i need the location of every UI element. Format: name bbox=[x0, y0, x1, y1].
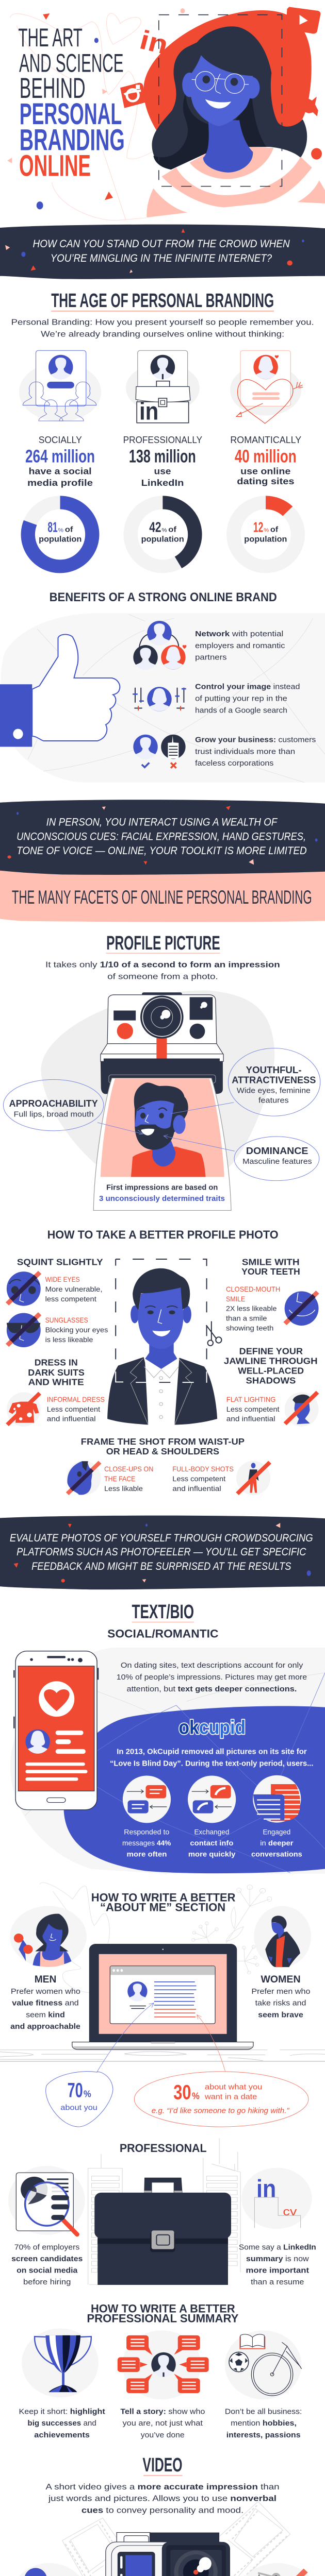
stat: engaged bbox=[251, 1775, 302, 1858]
banner: in person bbox=[0, 800, 325, 875]
intro text: It takes only 1/10 of a second to form an impression bbox=[45, 960, 280, 970]
intro text: We’re already branding ourselves online without thinking: bbox=[41, 330, 284, 338]
stat: responded: more often bbox=[126, 1850, 167, 1858]
tip: tell a story: you are, not just what bbox=[122, 2419, 203, 2428]
stat: linkedin summary: more important bbox=[246, 2267, 309, 2275]
dating text: attention, but text gets deeper connections. bbox=[126, 1685, 297, 1693]
stats: professionally: PROFESSIONALLY bbox=[123, 435, 203, 445]
stat: employers screen candidates bbox=[8, 2166, 85, 2286]
tip: squint slightly: Blocking your eyes bbox=[45, 1326, 108, 1334]
film strips bbox=[62, 2501, 290, 2576]
tip: dress in dark suits and white bbox=[7, 1357, 105, 1427]
benefit: control bbox=[133, 683, 300, 715]
stat: employers screen candidates: before hiring bbox=[23, 2278, 71, 2286]
video intro text bbox=[45, 2482, 280, 2515]
donut chart: 81%: 81 bbox=[47, 519, 58, 535]
benefit: network: employers and romantic bbox=[195, 641, 285, 650]
stats: socially: SOCIALLY bbox=[39, 435, 82, 445]
men text bbox=[10, 1974, 80, 2031]
icon: linkedin briefcase: in bbox=[139, 398, 158, 425]
callout: dominance: Masculine features bbox=[242, 1158, 312, 1166]
callout: 70% about you: about you bbox=[60, 2104, 98, 2112]
tip: define your jawline: and influential bbox=[226, 1415, 275, 1423]
callout: dominance bbox=[234, 1137, 319, 1181]
tip: removes bias bbox=[237, 2563, 317, 2576]
heading: about me: “ABOUT ME” SECTION bbox=[100, 1901, 225, 1913]
women text: Prefer men who bbox=[251, 1988, 310, 1996]
tip: squint slightly: More vulnerable, bbox=[45, 1285, 102, 1294]
pink banner background bbox=[0, 869, 325, 922]
decorative plants bbox=[40, 1883, 272, 1993]
men text: value fitness and bbox=[12, 1999, 79, 2008]
callout: 30% about what you want: e.g. “I’d like someone to go hiking with.” bbox=[152, 2107, 290, 2115]
callout: youthful attractiveness: YOUTHFUL- bbox=[246, 1065, 302, 1075]
stat: responded bbox=[122, 1776, 171, 1858]
section: how to take a better profile photo bbox=[0, 1257, 325, 1589]
callout: dominance: DOMINANCE bbox=[246, 1145, 308, 1156]
men text: seem kind bbox=[26, 2011, 65, 2019]
heading: professional summary: PROFESSIONAL SUMMARY bbox=[87, 2312, 239, 2325]
decorative pink curves bbox=[10, 13, 152, 221]
subheading: social/romantic: SOCIAL/ROMANTIC bbox=[107, 1627, 218, 1640]
stat: responded: messages 44% bbox=[122, 1839, 171, 1847]
thumbs up hand bbox=[0, 634, 120, 747]
callout: youthful attractiveness bbox=[228, 1048, 320, 1116]
stat: exchanged: contact info bbox=[190, 1839, 234, 1847]
illustration: woman portrait with social icons bbox=[120, 7, 325, 217]
donut chart: 42%: % bbox=[161, 527, 167, 533]
benefit: network: partners bbox=[195, 653, 227, 662]
callout: 70% about you: % bbox=[84, 2089, 91, 2099]
section: text and bio bbox=[10, 1546, 325, 1874]
stats: romantically bbox=[230, 435, 302, 486]
tip: squint slightly: SQUINT SLIGHTLY bbox=[17, 1257, 103, 1267]
benefit: grow business bbox=[133, 735, 316, 768]
stats: socially bbox=[25, 435, 95, 488]
women text: WOMEN bbox=[261, 1974, 301, 1985]
tip: dress in dark suits and white: INFORMAL DRESS bbox=[47, 1396, 105, 1404]
briefcase bbox=[94, 2178, 231, 2285]
banner: intro question: HOW CAN YOU STAND OUT FROM THE CROWD WHEN bbox=[32, 238, 290, 250]
women text: seem brave bbox=[258, 2011, 303, 2019]
tip: demonstrates bbox=[11, 2563, 88, 2576]
women text bbox=[251, 1974, 310, 2019]
section: professional bbox=[8, 2138, 316, 2476]
men text: MEN bbox=[35, 1974, 56, 1985]
section: hero bbox=[0, 7, 325, 312]
section: benefits and many facets bbox=[0, 613, 325, 922]
tip: squint slightly: WIDE EYES bbox=[45, 1276, 80, 1284]
dating text bbox=[117, 1662, 307, 1693]
panel: okcupid bbox=[64, 1673, 325, 1873]
donut chart: 12% bbox=[234, 502, 298, 566]
benefit: control: Control your image instead bbox=[195, 683, 300, 691]
printed photo of man: 3 unconsciously determined traits bbox=[99, 1195, 225, 1203]
donut chart: 81%: of bbox=[65, 526, 73, 534]
stat: exchanged: Exchanged bbox=[194, 1828, 229, 1836]
stats: romantically: ROMANTICALLY bbox=[230, 435, 302, 445]
tip: frame the shot: FULL-BODY SHOTS bbox=[172, 1465, 234, 1473]
women text: take risks and bbox=[255, 1999, 306, 2008]
video intro text: A short video gives a more accurate impression than bbox=[45, 2482, 280, 2492]
donut chart: 42% bbox=[131, 502, 195, 566]
stats: socially: 264 million bbox=[25, 446, 95, 467]
heading: profile picture: PROFILE PICTURE bbox=[106, 932, 220, 954]
video intro text: cues to convey personality and mood. bbox=[82, 2506, 243, 2515]
tip: squint slightly: is less likeable bbox=[45, 1336, 93, 1344]
heading: text/bio: TEXT/BIO bbox=[132, 1601, 194, 1623]
benefit: grow business: trust individuals more than bbox=[195, 748, 295, 756]
men text: Prefer women who bbox=[11, 1988, 80, 1996]
stat: responded: Responded to bbox=[124, 1828, 169, 1836]
stats: professionally: LinkedIn bbox=[141, 478, 184, 488]
stats: socially: have a social bbox=[28, 466, 92, 477]
icon: social profile bbox=[19, 350, 101, 421]
tip: dress in dark suits and white: DRESS IN bbox=[35, 1357, 78, 1368]
tip: hobbies: interests, passions bbox=[226, 2431, 301, 2439]
men text: and approachable bbox=[10, 2023, 80, 2031]
man in suit within crop frame bbox=[107, 1259, 217, 1425]
benefit: grow business: faceless corporations bbox=[195, 759, 274, 768]
tip: trophy: Keep it short: highlight bbox=[19, 2408, 105, 2416]
stats: romantically: 40 million bbox=[235, 446, 297, 467]
dating text: 10% of people’s impressions. Pictures may get more bbox=[117, 1673, 307, 1682]
intro text: Personal Branding: How you present yourself so people remember you. bbox=[11, 318, 314, 327]
title bbox=[18, 23, 125, 182]
donut chart: 42%: population bbox=[141, 535, 184, 544]
heading: about me bbox=[91, 1891, 235, 1913]
donut chart: 12%: % bbox=[264, 527, 269, 533]
callout arrows bbox=[97, 2003, 225, 2072]
callout: 30% about what you want: 30 bbox=[173, 2080, 191, 2104]
heading: professional summary bbox=[87, 2302, 239, 2325]
callout: youthful attractiveness: Wide eyes, feminine bbox=[237, 1087, 311, 1095]
okcupid text: “Love Is Blind Day”. During the text-only period, users... bbox=[110, 1760, 314, 1768]
heading: video: VIDEO bbox=[142, 2454, 183, 2476]
tip: frame the shot: Less competent bbox=[172, 1475, 225, 1483]
tip: define your jawline: SHADOWS bbox=[246, 1375, 296, 1385]
tip: frame the shot: and influential bbox=[172, 1485, 221, 1493]
callout arrows bbox=[98, 1103, 235, 1151]
confetti bbox=[7, 8, 322, 209]
icon: linkedin briefcase bbox=[126, 350, 200, 425]
donut chart: 81%: % bbox=[58, 527, 63, 533]
section: video bbox=[10, 2476, 317, 2576]
phone with dating app bbox=[14, 1651, 98, 1810]
tip: smile with your teeth: showing teeth bbox=[226, 1325, 273, 1332]
benefits background bbox=[1, 613, 325, 783]
stat: linkedin summary: cv bbox=[283, 2205, 297, 2218]
tip: define your jawline: WELL-PLACED bbox=[238, 1365, 304, 1376]
icon: scissors bbox=[206, 1321, 222, 1346]
tip: frame the shot: OR HEAD & SHOULDERS bbox=[106, 1446, 219, 1456]
tip: trophy bbox=[19, 2329, 105, 2439]
tip: define your jawline bbox=[224, 1346, 319, 1427]
callout: approachability bbox=[3, 1079, 104, 1131]
tip: smile with your teeth bbox=[226, 1257, 319, 1332]
stat: engaged: Engaged bbox=[263, 1828, 290, 1836]
stat: linkedin summary bbox=[239, 2168, 316, 2286]
stat: linkedin summary: than a resume bbox=[251, 2278, 304, 2286]
laptop bbox=[72, 1944, 253, 2049]
man in jacket bbox=[254, 1906, 311, 1967]
benefit: control: of putting your rep in the bbox=[195, 694, 287, 703]
background buildings bbox=[88, 2138, 240, 2284]
icon: romantic heart bbox=[230, 350, 303, 423]
stat: employers screen candidates: on social media bbox=[17, 2267, 78, 2275]
okcupid text bbox=[110, 1748, 314, 1768]
tip: smile with your teeth: CLOSED-MOUTH bbox=[226, 1285, 280, 1294]
benefit: grow business: Grow your business: customers bbox=[195, 736, 316, 744]
tip: smile with your teeth: 2X less likeable bbox=[226, 1305, 277, 1313]
tip: define your jawline: FLAT LIGHTING bbox=[226, 1396, 275, 1404]
banner: in person: IN PERSON, YOU INTERACT USING A WEALTH OF bbox=[46, 816, 278, 828]
printed photo of man: First impressions are based on bbox=[106, 1184, 218, 1192]
callout: youthful attractiveness: features bbox=[258, 1097, 289, 1105]
donut chart: 42%: 42 bbox=[149, 519, 161, 535]
tip: frame the shot: THE FACE bbox=[104, 1475, 136, 1483]
heading: benefits: BENEFITS OF A STRONG ONLINE BRAND bbox=[50, 591, 277, 604]
title: THE ART bbox=[18, 23, 83, 52]
tip: dress in dark suits and white: AND WHITE bbox=[28, 1377, 84, 1387]
intro text: of someone from a photo. bbox=[107, 972, 218, 981]
tip: trophy: big successes and bbox=[27, 2419, 96, 2428]
stats: professionally: use bbox=[154, 466, 171, 477]
banner: intro question: YOU’RE MINGLING IN THE INFINITE INTERNET? bbox=[51, 252, 272, 264]
heading: how to take a better profile photo: HOW TO TAKE A BETTER PROFILE PHOTO bbox=[47, 1228, 279, 1241]
tip: tell a story bbox=[118, 2330, 209, 2439]
stat: exchanged: more quickly bbox=[188, 1850, 236, 1858]
banner: evaluate photos bbox=[0, 1516, 325, 1589]
tip: define your jawline: JAWLINE THROUGH bbox=[224, 1355, 318, 1366]
callout: 30% about what you want: want in a date bbox=[204, 2093, 257, 2101]
callout: 30% about what you want: % bbox=[192, 2091, 200, 2101]
stat: employers screen candidates: screen candidates bbox=[11, 2255, 83, 2263]
tip: tell a story: you’ve done bbox=[141, 2431, 185, 2439]
stats: professionally bbox=[123, 435, 203, 488]
tip: frame the shot: CLOSE-UPS ON bbox=[104, 1465, 153, 1473]
stat: engaged: in deeper bbox=[260, 1839, 294, 1847]
section: age of personal branding bbox=[11, 311, 314, 604]
tip: smile with your teeth: SMILE bbox=[226, 1295, 246, 1303]
stats: socially: media profile bbox=[27, 478, 93, 488]
stats: romantically: dating sites bbox=[237, 476, 295, 486]
okcupid text: In 2013, OkCupid removed all pictures on its site for bbox=[117, 1748, 307, 1756]
title: PERSONAL bbox=[20, 97, 122, 131]
tip: frame the shot bbox=[67, 1436, 270, 1495]
section: about me bbox=[0, 1883, 325, 2155]
polaroid camera bbox=[101, 992, 223, 1094]
banner: intro question bbox=[0, 225, 325, 279]
intro text bbox=[45, 960, 280, 981]
tip: hobbies: mention hobbies, bbox=[231, 2419, 297, 2428]
callout: youthful attractiveness: ATTRACTIVENESS bbox=[232, 1075, 316, 1085]
title: BEHIND bbox=[20, 73, 86, 105]
title: ONLINE bbox=[19, 149, 91, 182]
stat: linkedin summary: summary is now bbox=[246, 2255, 309, 2263]
tip: frame the shot: FRAME THE SHOT FROM WAIST-UP bbox=[81, 1436, 245, 1447]
tip: hobbies: Don’t be all business: bbox=[225, 2408, 302, 2416]
woman with dumbbell bbox=[10, 1906, 87, 1967]
tip: squint slightly bbox=[7, 1257, 108, 1347]
donut chart: 81% bbox=[28, 502, 92, 566]
background blob bbox=[41, 990, 274, 1168]
heading: professional summary: HOW TO WRITE A BETTER bbox=[91, 2302, 235, 2315]
intro text bbox=[11, 318, 314, 338]
tip: hobbies bbox=[225, 2330, 302, 2439]
benefit: network bbox=[133, 621, 285, 670]
background blob bbox=[10, 1648, 325, 1874]
callout: 70% about you: 70 bbox=[68, 2079, 83, 2102]
stats: professionally: 138 million bbox=[129, 446, 196, 467]
tip: smile with your teeth: SMILE WITH bbox=[242, 1257, 300, 1267]
tip: define your jawline: Less competent bbox=[226, 1405, 280, 1414]
donut chart: 81%: population bbox=[39, 535, 82, 544]
tip: dress in dark suits and white: DARK SUITS bbox=[28, 1367, 85, 1378]
tip: define your jawline: DEFINE YOUR bbox=[239, 1346, 303, 1356]
tip: tell a story: Tell a story: show who bbox=[120, 2408, 205, 2416]
donut chart: 12%: 12 bbox=[253, 519, 263, 535]
tip: dress in dark suits and white: and influential bbox=[47, 1415, 96, 1423]
printed photo of man bbox=[93, 1078, 231, 1210]
callout: approachability: APPROACHABILITY bbox=[9, 1098, 98, 1109]
benefit: control: hands of a Google search bbox=[195, 706, 287, 715]
heading: about me: HOW TO WRITE A BETTER bbox=[91, 1891, 235, 1904]
stat: linkedin summary: Some say a LinkedIn bbox=[239, 2244, 316, 2251]
tip: smile with your teeth: YOUR TEETH bbox=[241, 1266, 300, 1277]
tip: dress in dark suits and white: Less competent bbox=[47, 1405, 100, 1414]
stat: engaged: conversations bbox=[251, 1850, 302, 1858]
desk bbox=[0, 2050, 325, 2061]
callout: 30% about what you want bbox=[134, 2072, 308, 2127]
stats: romantically: use online bbox=[240, 466, 290, 477]
action camera bbox=[95, 2533, 230, 2576]
tip: frame the shot: Less likable bbox=[104, 1485, 143, 1493]
banner text continued bbox=[14, 1546, 311, 1583]
heading: professional: PROFESSIONAL bbox=[120, 2142, 207, 2155]
logo: okcupid: okcupid bbox=[178, 1716, 246, 1738]
stat: linkedin summary: in bbox=[256, 2175, 276, 2202]
dating text: On dating sites, text descriptions account for only bbox=[121, 1662, 303, 1670]
callout: approachability: Full lips, broad mouth bbox=[14, 1111, 94, 1118]
tip: squint slightly: SUNGLASSES bbox=[45, 1317, 88, 1325]
stat: exchanged bbox=[188, 1776, 236, 1858]
section: profile picture bbox=[3, 932, 320, 1241]
dashed crop frame bbox=[159, 15, 282, 187]
tip: smile with your teeth: than a smile bbox=[226, 1315, 267, 1323]
donut chart: 12%: population bbox=[244, 535, 287, 544]
callout: 70% about you bbox=[46, 2072, 113, 2127]
tip: squint slightly: less competent bbox=[45, 1295, 96, 1303]
tip: trophy: achievements bbox=[34, 2431, 90, 2439]
illustration: woman portrait with social icons: in bbox=[137, 25, 171, 60]
title: BRANDING bbox=[20, 123, 125, 157]
video intro text: just words and pictures. Allows you to use nonverbal bbox=[48, 2494, 277, 2503]
benefit: network: Network with potential bbox=[195, 630, 283, 638]
donut chart: 12%: of bbox=[270, 526, 278, 534]
stat: employers screen candidates: 70% of employers bbox=[14, 2244, 79, 2251]
title: AND SCIENCE bbox=[19, 48, 123, 77]
callout: 30% about what you want: about what you bbox=[205, 2083, 262, 2091]
donut chart: 42%: of bbox=[168, 526, 176, 534]
